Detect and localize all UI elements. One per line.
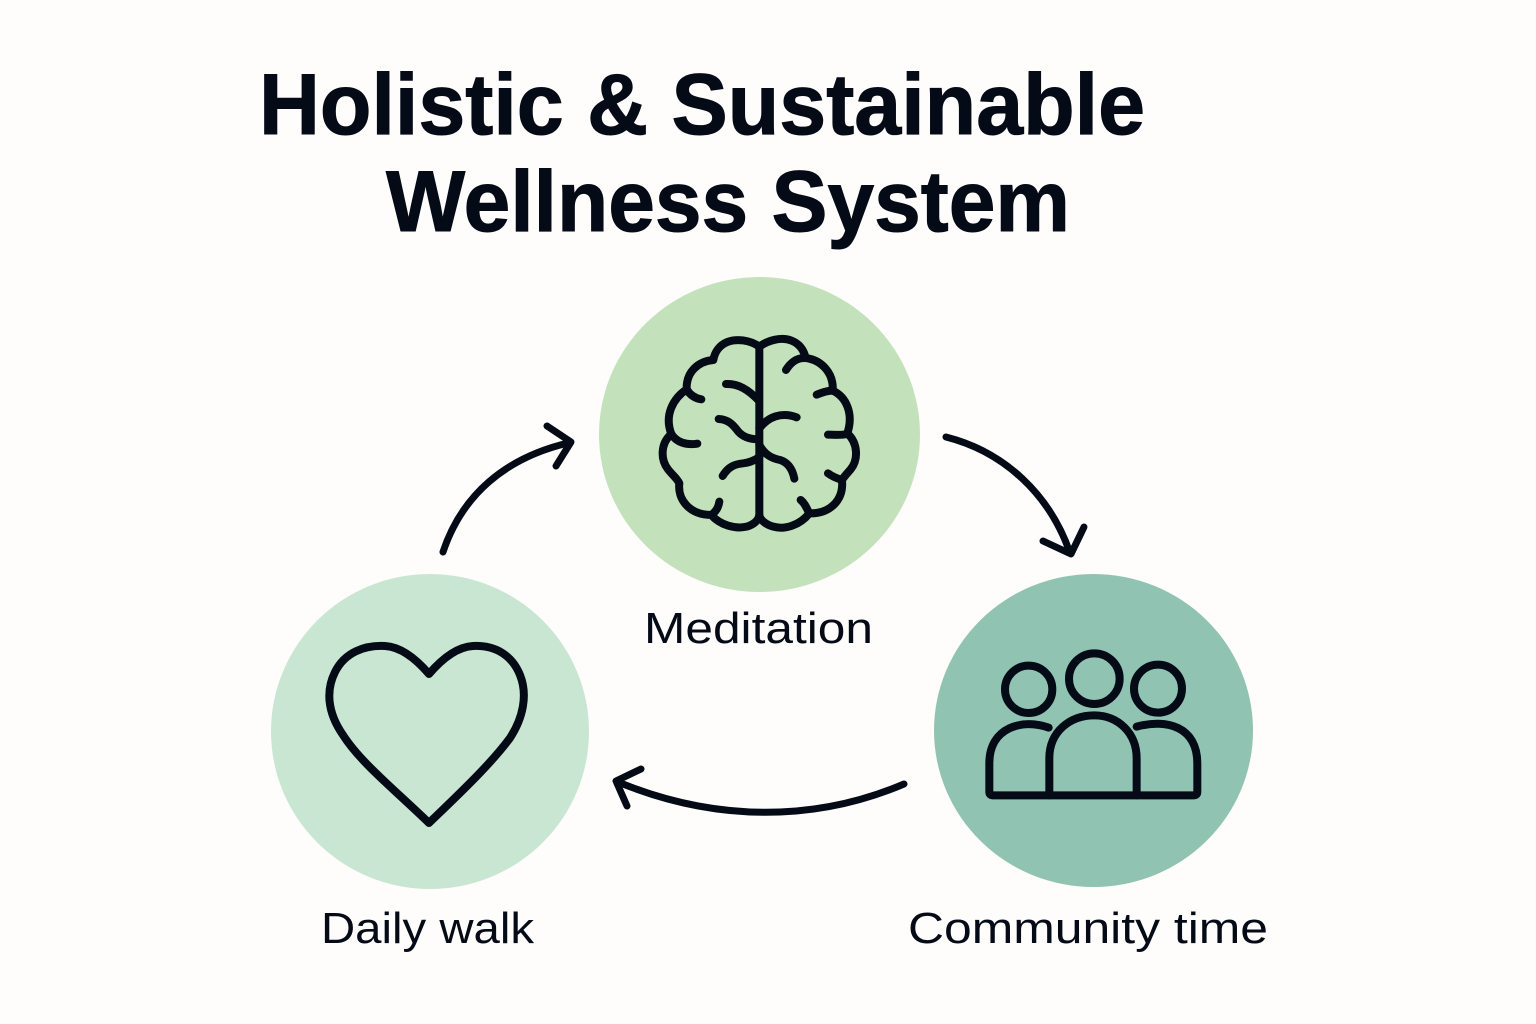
arrow: daily walk to meditation <box>443 426 571 552</box>
arrow: community time to daily walk <box>616 769 904 812</box>
label: meditation: Meditation <box>644 604 873 653</box>
title: Holistic & Sustainable <box>259 57 1145 153</box>
label: daily walk: Daily walk <box>321 904 535 953</box>
panel: meditation circle <box>599 277 920 592</box>
panel: daily walk circle <box>271 574 589 889</box>
label: community time: Community time <box>908 904 1268 953</box>
icon: community people <box>989 653 1197 795</box>
arrow: meditation to community time <box>946 437 1084 554</box>
title <box>259 57 1145 250</box>
icon: heart <box>329 646 524 823</box>
icon: brain <box>663 339 856 528</box>
title: Wellness System <box>386 154 1070 250</box>
panel: community time circle <box>934 574 1253 887</box>
